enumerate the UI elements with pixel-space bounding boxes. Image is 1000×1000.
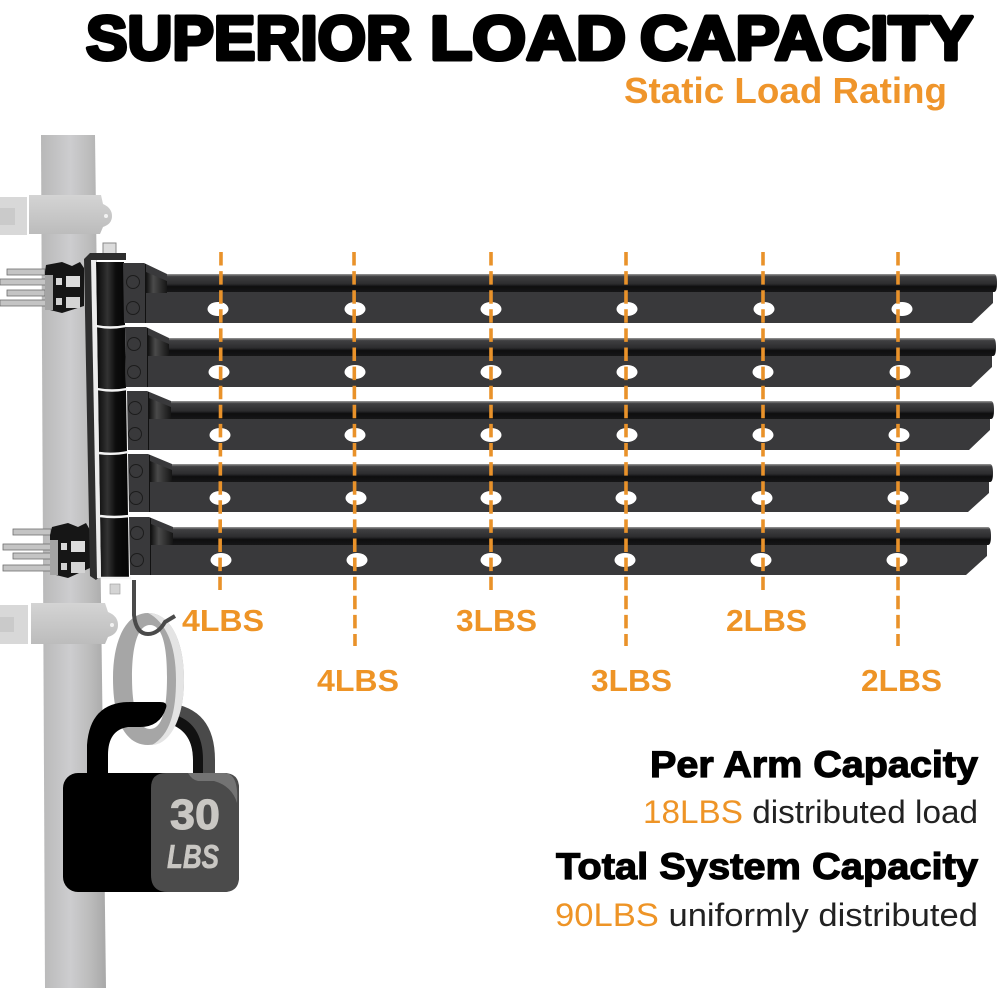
- capacity text block: [555, 744, 978, 933]
- icon: 30 lbs weight with ring: [63, 580, 239, 892]
- ring: [113, 613, 184, 745]
- weight body: [63, 773, 239, 892]
- subtitle: Static Load Rating: [624, 70, 947, 111]
- title: CAPACITY: [640, 4, 973, 74]
- title: [86, 4, 973, 74]
- arm 1: [123, 263, 997, 323]
- shackle left side: [87, 702, 166, 775]
- load labels: 3LBS: [591, 663, 672, 698]
- title: SUPERIOR: [86, 4, 411, 74]
- arm 4: [128, 454, 993, 512]
- load labels: 3LBS: [456, 603, 537, 638]
- arm 3: [127, 391, 994, 450]
- load labels: 4LBS: [182, 603, 264, 638]
- total system value: 90LBS uniformly distributed: [555, 897, 978, 933]
- load labels: 4LBS: [317, 663, 399, 698]
- per arm heading: Per Arm Capacity: [650, 744, 978, 785]
- title: LOAD: [430, 4, 626, 74]
- hinge column: [84, 243, 131, 594]
- dashed load lines: [220, 252, 898, 646]
- arm 2: [125, 327, 996, 387]
- icon: 30 lbs weight with ring: 30: [170, 791, 220, 839]
- per arm value: 18LBS distributed load: [643, 794, 978, 830]
- lower clamp: [3, 523, 90, 578]
- hook: [134, 580, 175, 634]
- total system heading: Total System Capacity: [556, 846, 978, 887]
- shackle right side: [168, 703, 215, 775]
- arm 5: [129, 517, 991, 575]
- load labels: 2LBS: [861, 663, 942, 698]
- load labels: 2LBS: [726, 603, 807, 638]
- pole with brackets: [0, 135, 118, 988]
- load labels: [182, 603, 942, 698]
- upper clamp: [0, 262, 84, 313]
- icon: 30 lbs weight with ring: LBS: [167, 838, 219, 875]
